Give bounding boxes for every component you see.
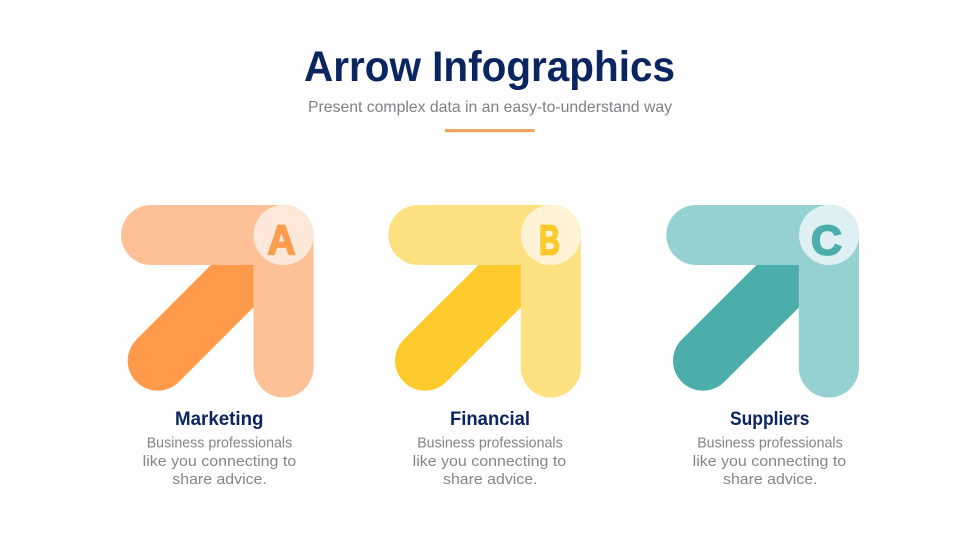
- arrow icon C: C: [811, 216, 842, 264]
- arrow icon A: A: [268, 216, 296, 264]
- heading: financial: Financial: [450, 409, 530, 430]
- description: financial: share advice.: [443, 471, 538, 488]
- panel: financial: [388, 205, 581, 488]
- description: financial: [413, 434, 566, 488]
- title underline: [445, 129, 534, 132]
- description: suppliers: share advice.: [723, 471, 818, 488]
- description: suppliers: like you connecting to: [693, 453, 846, 470]
- description: suppliers: Business professionals: [697, 434, 843, 452]
- description: financial: Business professionals: [417, 434, 563, 452]
- description: marketing: [143, 434, 296, 488]
- description: financial: like you connecting to: [413, 453, 566, 470]
- panel: marketing: [121, 205, 314, 488]
- arrow icon B: B: [539, 216, 560, 264]
- subtitle: Present complex data in an easy-to-understand way: [308, 99, 672, 116]
- heading: suppliers: Suppliers: [730, 409, 810, 430]
- panel: suppliers: [666, 205, 859, 488]
- heading: marketing: Marketing: [175, 409, 264, 430]
- arrow icon C: [666, 205, 859, 398]
- description: suppliers: [693, 434, 846, 488]
- description: marketing: Business professionals: [147, 434, 292, 452]
- description: marketing: like you connecting to: [143, 453, 296, 470]
- arrow icon B: [388, 205, 581, 398]
- title: Arrow Infographics: [304, 43, 675, 91]
- description: marketing: share advice.: [172, 471, 267, 488]
- arrow icon A: [121, 205, 314, 398]
